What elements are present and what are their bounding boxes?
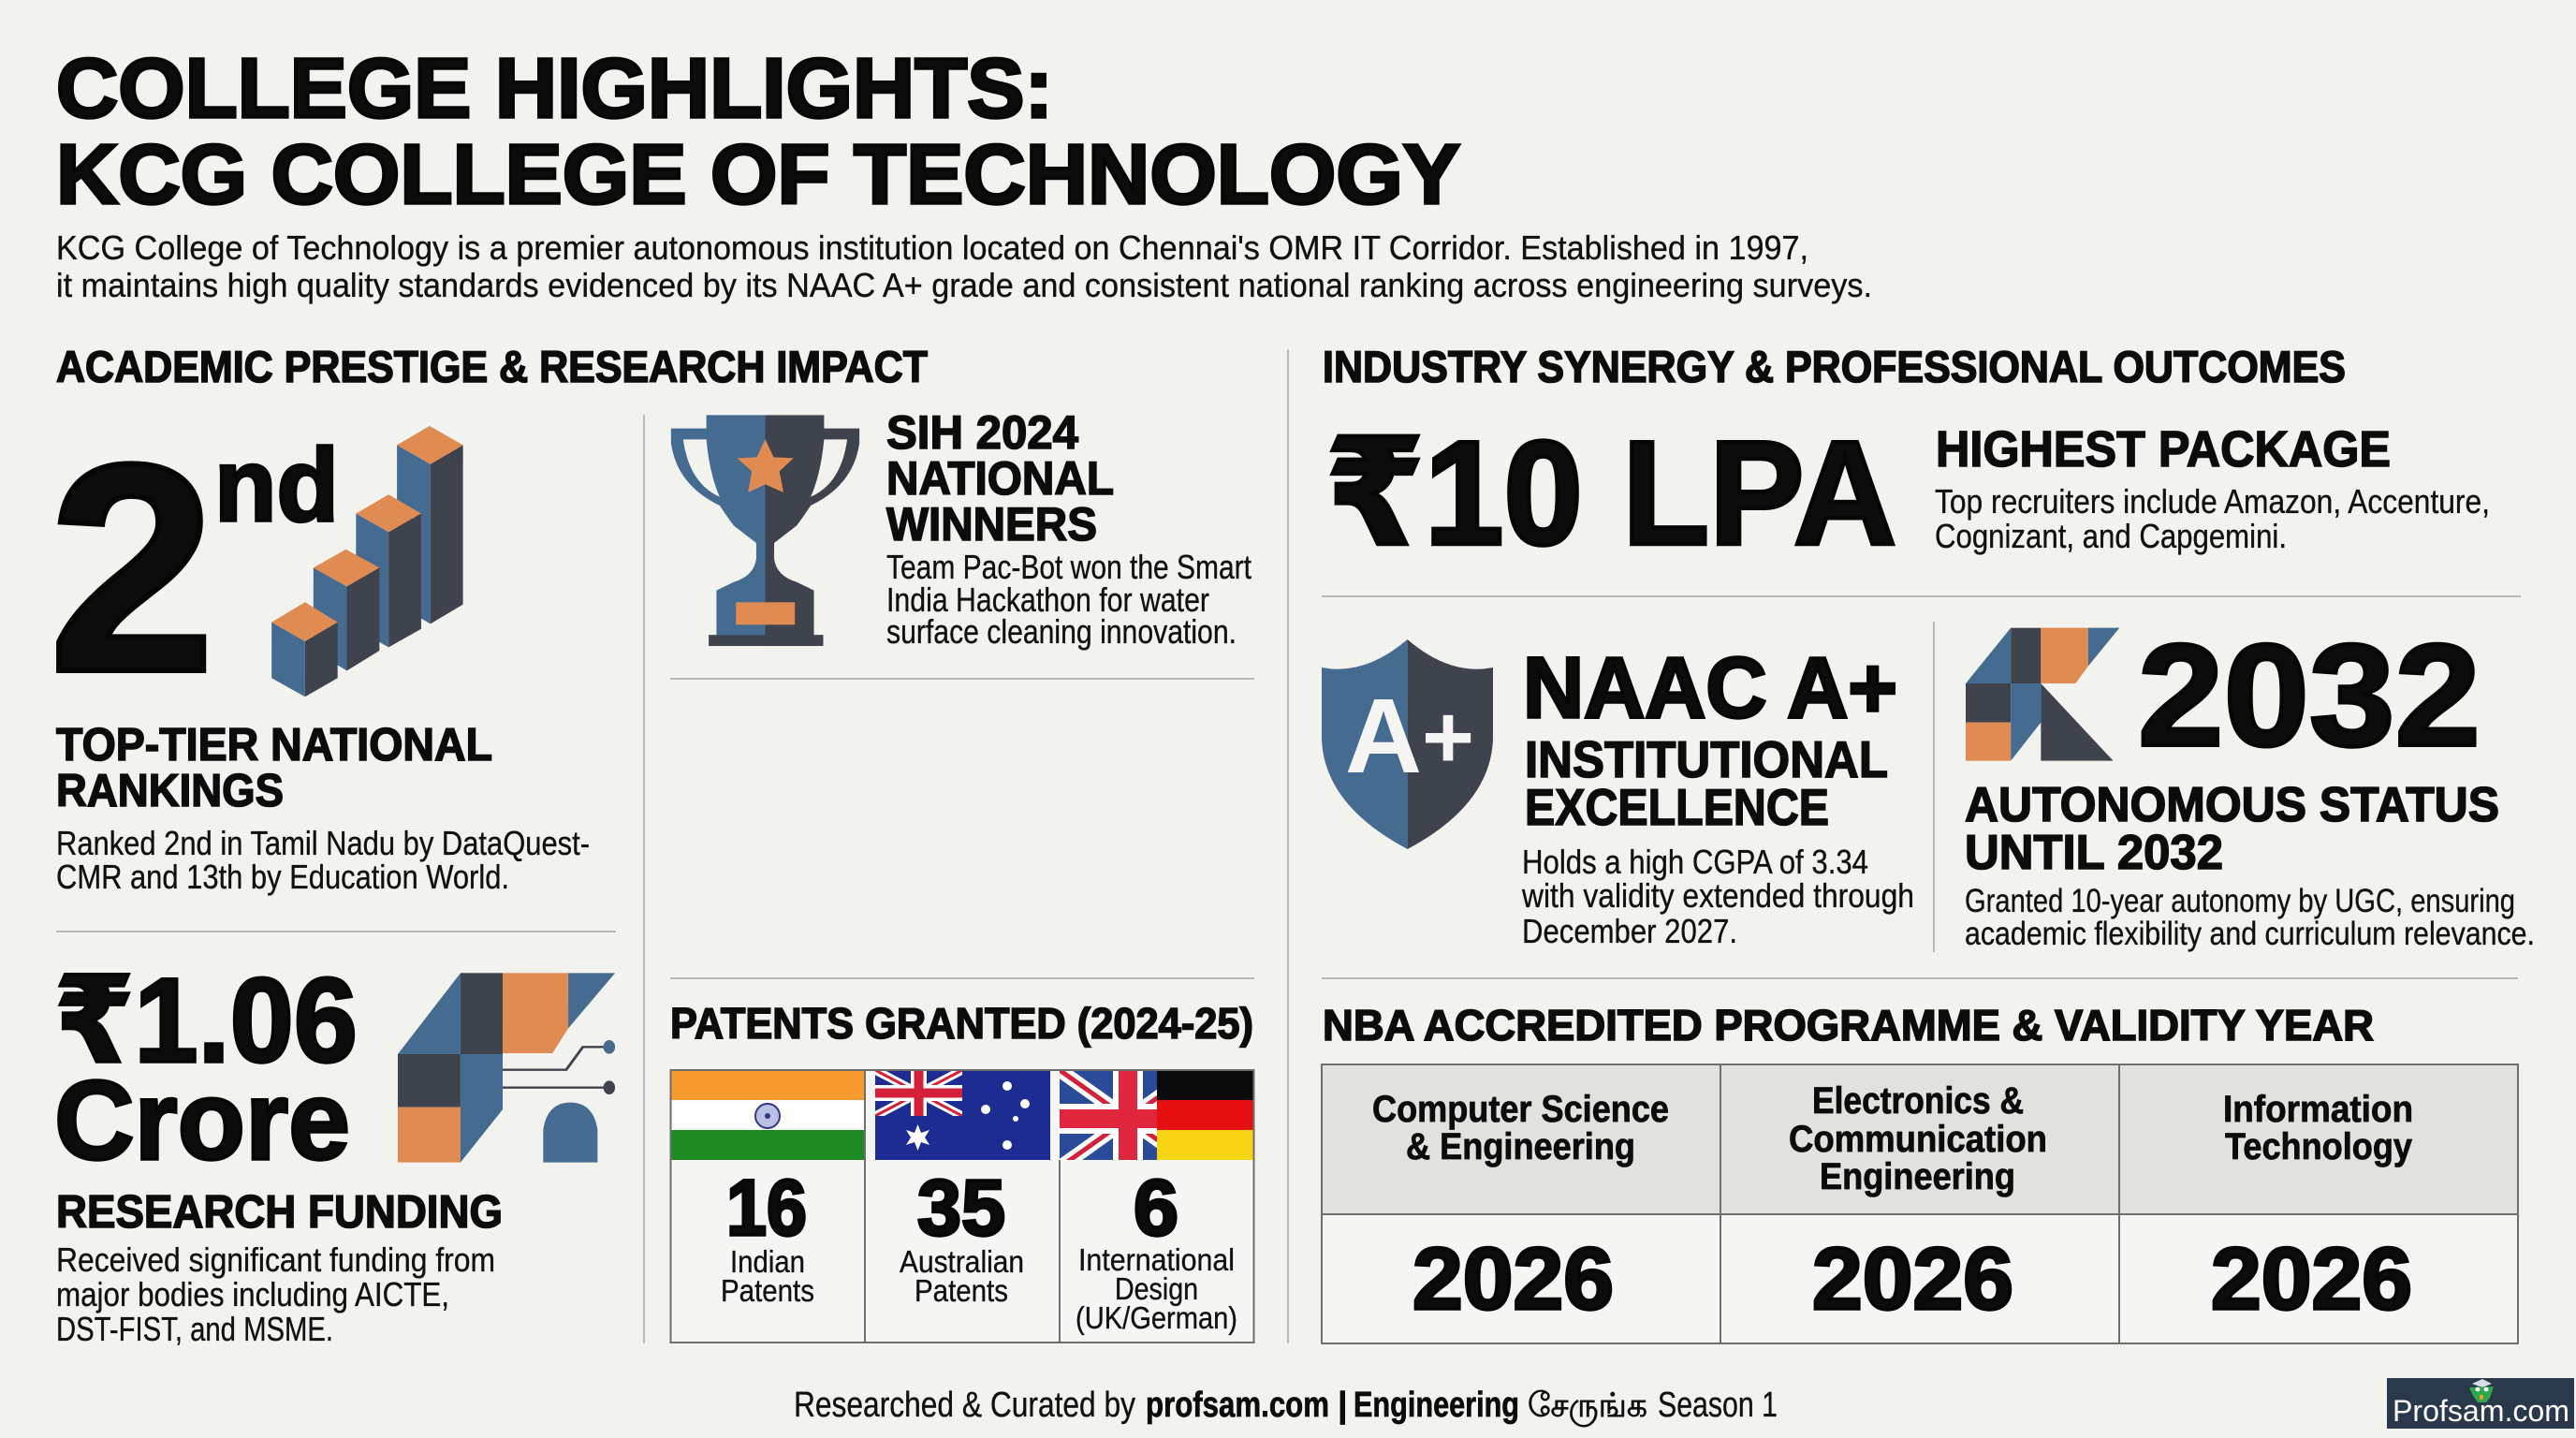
text: rankings description: CMR and 13th by Education World. — [56, 858, 509, 896]
stat: 35 Australian patents: Australian — [900, 1244, 1024, 1279]
table: patents granted — [670, 1070, 1254, 1343]
heading: institutional excellence — [1525, 730, 1888, 836]
intro text — [56, 228, 1872, 304]
heading: autonomous status — [1965, 778, 2499, 880]
footer credit: Engineering — [1354, 1386, 1519, 1425]
column: electronics and communication: Electronics & — [1812, 1080, 2024, 1122]
text: SIH description — [886, 548, 1251, 651]
heading: SIH 2024 national winners — [886, 406, 1114, 550]
heading: institutional excellence: INSTITUTIONAL — [1525, 730, 1888, 788]
text: SIH description: India Hackathon for water — [886, 580, 1209, 619]
title: COLLEGE HIGHLIGHTS: — [56, 42, 1053, 136]
column: computer science: Computer Science — [1372, 1089, 1669, 1130]
stat: 1.06 crore — [54, 954, 358, 1183]
column: information technology: 2026 — [2211, 1229, 2412, 1328]
stat: 6 international design: International — [1078, 1242, 1235, 1277]
text: research funding description: DST-FIST, and MSME. — [56, 1310, 333, 1348]
column: electronics and communication — [1789, 1080, 2047, 1328]
text: NAAC description: Holds a high CGPA of 3.34 — [1522, 843, 1868, 881]
heading: highest package: HIGHEST PACKAGE — [1936, 421, 2391, 477]
stat: 6 international design — [1076, 1164, 1237, 1335]
text: research funding description — [56, 1240, 495, 1348]
stat: 35 Australian patents: Patents — [915, 1273, 1008, 1308]
intro text: it maintains high quality standards evidenced by its NAAC A+ grade and consistent national ranking across engineering surveys. — [56, 266, 1872, 304]
text: NAAC description: with validity extended through — [1521, 876, 1914, 915]
column: computer science — [1372, 1089, 1669, 1328]
heading: SIH 2024 national winners: NATIONAL — [886, 452, 1114, 505]
icon: autonomy K blocks — [1966, 628, 2119, 761]
footer credit: Season 1 — [1658, 1386, 1778, 1425]
stat: 2032: 2032 — [2138, 614, 2481, 776]
stat: 2nd — [49, 403, 339, 733]
heading: NBA accredited programmes: NBA ACCREDITED PROGRAMME & VALIDITY YEAR — [1323, 1001, 2374, 1049]
text: NAAC description: December 2027. — [1522, 912, 1737, 950]
text: NAAC description — [1521, 843, 1914, 950]
heading: institutional excellence: EXCELLENCE — [1525, 778, 1829, 836]
logo: Profsam.com badge: Profsam.com — [2393, 1394, 2569, 1428]
text: research funding description: Received significant funding from — [56, 1240, 495, 1279]
text: autonomy description — [1965, 883, 2535, 952]
footer credit: | — [1338, 1386, 1348, 1425]
footer credit: சேருங்க — [1528, 1386, 1647, 1427]
logo: Profsam.com badge — [2387, 1378, 2574, 1429]
title — [56, 42, 1460, 222]
icon: isometric rising bars — [271, 426, 463, 697]
stat: NAAC A+: NAAC A+ — [1523, 640, 1897, 736]
stat: 1.06 crore: ₹1.06 — [54, 954, 358, 1088]
panel: industry synergy and professional outcomes — [1322, 342, 2535, 1343]
table: NBA accreditation — [1322, 1064, 2518, 1343]
text: recruiters description: Cognizant, and Capgemini. — [1935, 517, 2287, 555]
title: KCG COLLEGE OF TECHNOLOGY — [56, 128, 1460, 222]
flag: India — [671, 1070, 864, 1160]
stat: 6 international design: Design — [1115, 1271, 1198, 1306]
stat: 6 international design: (UK/German) — [1076, 1300, 1237, 1335]
intro text: KCG College of Technology is a premier autonomous institution located on Chennai's OMR IT Corridor. Established in 1997, — [56, 228, 1808, 267]
column: computer science: 2026 — [1412, 1229, 1614, 1328]
column: information technology: Information — [2223, 1089, 2413, 1130]
heading: SIH 2024 national winners: SIH 2024 — [886, 406, 1078, 459]
column: information technology: Technology — [2225, 1126, 2413, 1167]
heading: top-tier national rankings — [56, 720, 492, 816]
stat: 16 Indian patents — [721, 1164, 814, 1308]
column: computer science: & Engineering — [1406, 1126, 1635, 1167]
flag: UK and Germany — [1060, 1070, 1254, 1167]
heading: top-tier national rankings: RANKINGS — [56, 766, 284, 816]
heading: autonomous status: UNTIL 2032 — [1965, 826, 2223, 880]
panel: academic prestige and research impact — [49, 342, 1254, 1348]
stat: 16 Indian patents: 16 — [726, 1164, 807, 1252]
text: SIH description: surface cleaning innovation. — [886, 612, 1237, 651]
icon: owl mascot — [2469, 1379, 2494, 1402]
text: recruiters description: Top recruiters include Amazon, Accenture, — [1935, 482, 2490, 521]
footer credit: profsam.com — [1146, 1386, 1329, 1425]
icon: trophy — [671, 415, 859, 646]
section heading: academic: ACADEMIC PRESTIGE & RESEARCH IMPACT — [56, 342, 928, 391]
text: SIH description: Team Pac-Bot won the Smart — [886, 548, 1251, 586]
stat: 10 LPA: ₹10 LPA — [1325, 411, 1896, 576]
stat: 16 Indian patents: Indian — [730, 1244, 805, 1279]
stat: 2nd: 2 — [49, 403, 215, 733]
icon: A+ shield — [1322, 639, 1493, 849]
column: electronics and communication: Engineering — [1820, 1156, 2015, 1197]
footer credit — [794, 1386, 1778, 1427]
column: electronics and communication: 2026 — [1812, 1229, 2013, 1328]
column: electronics and communication: Communication — [1789, 1119, 2047, 1160]
stat: 16 Indian patents: Patents — [721, 1273, 814, 1308]
heading: SIH 2024 national winners: WINNERS — [886, 498, 1097, 550]
text: research funding description: major bodies including AICTE, — [56, 1275, 449, 1313]
heading: autonomous status: AUTONOMOUS STATUS — [1965, 778, 2499, 832]
stat: 35 Australian patents — [900, 1164, 1024, 1308]
stat: 6 international design: 6 — [1134, 1164, 1178, 1252]
flag: Australia — [875, 1070, 1050, 1160]
stat: 2nd: nd — [214, 428, 339, 543]
text: rankings description: Ranked 2nd in Tamil Nadu by DataQuest- — [56, 824, 590, 862]
icon: research funding circuit blocks — [398, 973, 615, 1163]
heading: patents granted: PATENTS GRANTED (2024-25) — [670, 999, 1253, 1048]
icon: A+ shield: A — [1345, 677, 1422, 795]
heading: top-tier national rankings: TOP-TIER NATIONAL — [56, 720, 492, 770]
stat: 35 Australian patents: 35 — [917, 1164, 1005, 1252]
stat: 1.06 crore: Crore — [54, 1058, 350, 1183]
heading: research funding: RESEARCH FUNDING — [56, 1187, 503, 1238]
text: recruiters description — [1935, 482, 2490, 555]
column: information technology — [2211, 1089, 2413, 1328]
icon: A+ shield: + — [1422, 687, 1474, 787]
footer credit: Researched & Curated by — [794, 1386, 1135, 1425]
text: rankings description — [56, 824, 590, 896]
section heading: industry: INDUSTRY SYNERGY & PROFESSIONAL OUTCOMES — [1323, 342, 2346, 391]
